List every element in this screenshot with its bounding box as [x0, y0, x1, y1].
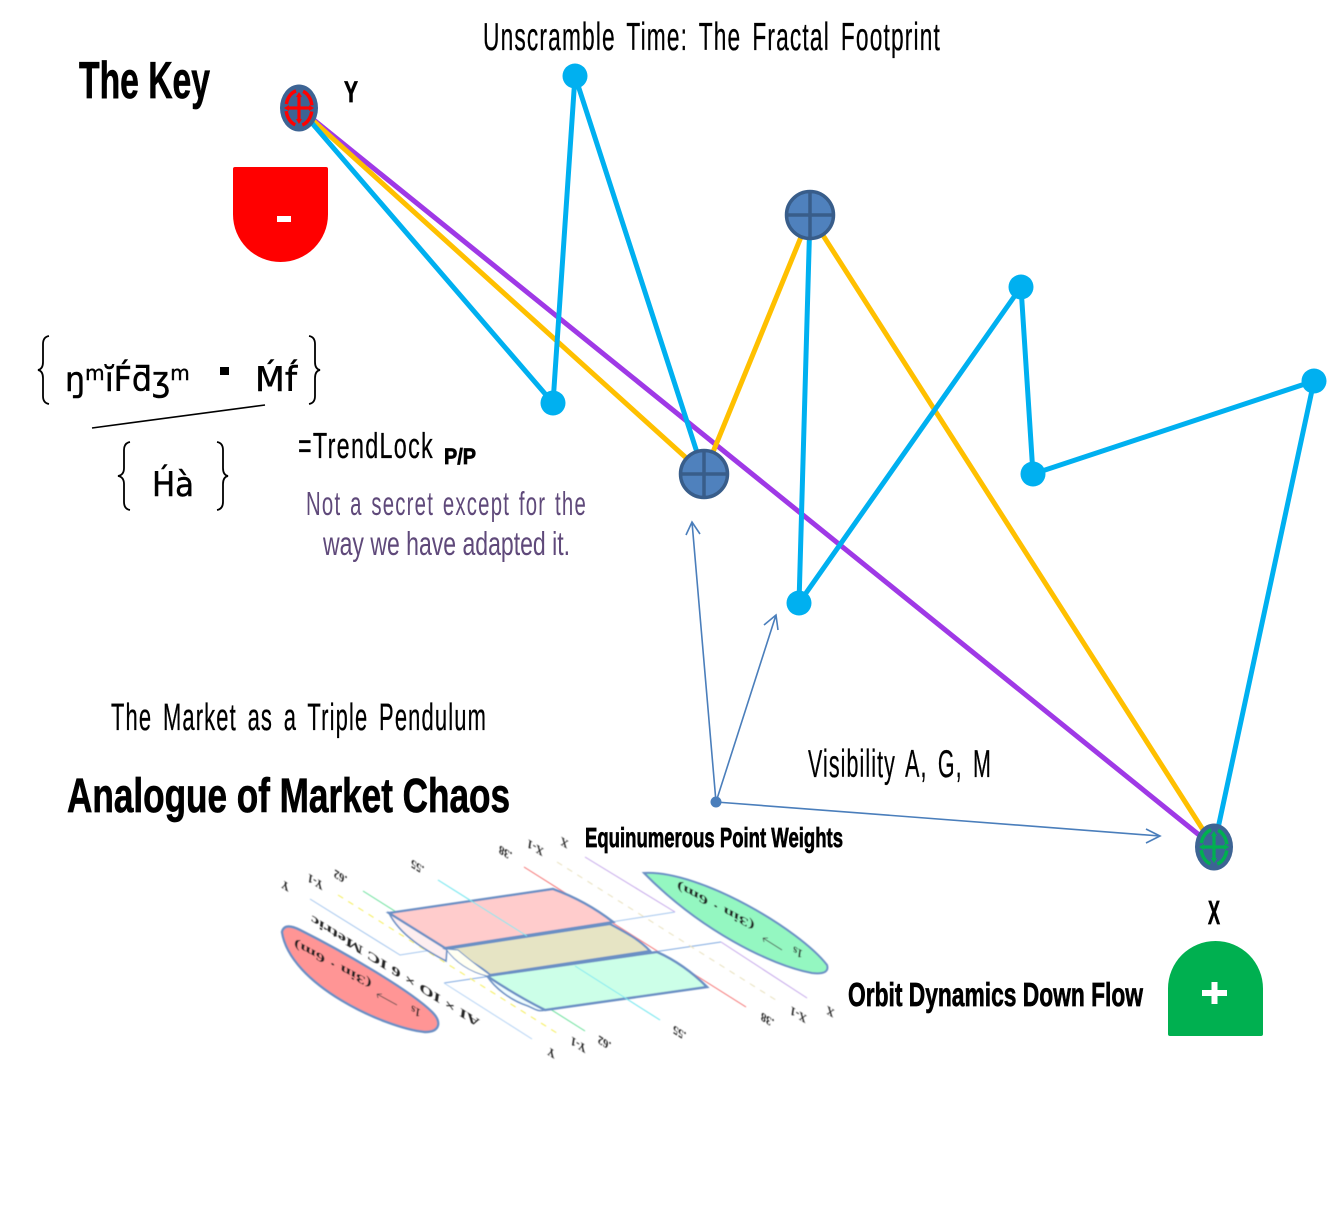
node: top blue cross circle — [786, 192, 834, 238]
chart axis labels bottom: .55 — [672, 1022, 687, 1044]
chart lobe text: 1s — [410, 1002, 421, 1021]
formula: numerator: ŋᵐĭF́ƌʒᵐ — [65, 359, 190, 400]
chart lobe text: AI × IO × 6 IC Metric — [310, 912, 480, 1031]
chart cyan line overlay — [438, 880, 660, 1020]
formula: fraction line — [92, 405, 265, 428]
blue fractal path: first leg — [299, 76, 704, 474]
label: equinumerous point weights: Equinumerous Point Weights — [585, 822, 843, 853]
label: Y: Y — [344, 76, 358, 109]
text: TrendLock: =TrendLock — [298, 425, 434, 466]
blue dots — [540, 64, 1326, 616]
orange path — [299, 108, 1214, 847]
chart pink band — [389, 889, 613, 948]
formula: denominator: H́à — [152, 464, 194, 505]
chart axis labels bottom — [546, 1003, 835, 1062]
chart axis labels bottom: Y-1 — [570, 1033, 587, 1056]
chart axis labels bottom: .38 — [760, 1009, 775, 1031]
formula: numerator: Ḿf́ — [255, 359, 298, 400]
chart axis labels top: Y — [280, 877, 290, 895]
chart lobe text: 1s — [792, 943, 803, 962]
chart axis labels bottom: .62 — [597, 1032, 612, 1054]
chart axis labels top — [280, 834, 569, 895]
text: P/P subscript: P/P — [444, 444, 476, 469]
chart red lobe — [282, 926, 438, 1032]
blue fractal path: second leg — [799, 215, 1314, 847]
heading: analogue of market chaos: Analogue of Market Chaos — [67, 770, 510, 823]
chart axis labels bottom: Y — [546, 1044, 556, 1062]
chart axis labels top: X-1 — [526, 836, 544, 860]
text: secret note line two: way we have adapted it. — [322, 525, 570, 562]
chart pink lobe — [389, 913, 447, 961]
chart white lobe — [446, 949, 490, 976]
chart mint band — [487, 952, 707, 1010]
icon: green plus shape — [1168, 941, 1263, 1036]
label: X: X — [1208, 894, 1220, 931]
chart axis labels top: .55 — [410, 856, 425, 878]
chart olive band — [446, 924, 650, 975]
label: orbit dynamics down flow: Orbit Dynamics Down Flow — [848, 976, 1143, 1013]
chart lobe text: (3in · 6m) — [676, 879, 755, 934]
chart axis labels top: .62 — [333, 866, 348, 888]
formula: denominator — [118, 442, 228, 510]
purple trend line — [299, 108, 1214, 847]
chart axis labels bottom: X — [825, 1003, 835, 1021]
chart axis labels top: X — [559, 834, 569, 852]
chart grid lines — [310, 857, 807, 1039]
chart axis labels top: .38 — [498, 842, 513, 864]
node: Y red cross ellipse — [280, 84, 318, 132]
title: Unscramble Time: The Fractal Footprint — [483, 16, 941, 59]
node: lower blue cross circle — [680, 450, 728, 498]
label: triple pendulum: The Market as a Triple Pendulum — [111, 697, 487, 739]
chart lobe text — [293, 879, 803, 1031]
chart lobe text: (3in · 6m) — [293, 937, 372, 992]
chart cyan lobe — [487, 976, 545, 1011]
chart axis labels bottom: X-1 — [789, 1003, 807, 1027]
heading: the key: The Key — [79, 52, 210, 110]
isometric chart — [280, 834, 835, 1062]
chart green lobe — [644, 873, 827, 973]
text: secret note line one: Not a secret except for the — [306, 485, 587, 522]
arrows: visibility — [686, 522, 1160, 843]
formula: numerator — [38, 336, 320, 404]
chart axis labels top: Y-1 — [307, 870, 324, 893]
node: X green cross ellipse — [1195, 824, 1233, 870]
icon: red minus shape — [233, 167, 328, 262]
label: visibility: Visibility A, G, M — [808, 743, 992, 786]
